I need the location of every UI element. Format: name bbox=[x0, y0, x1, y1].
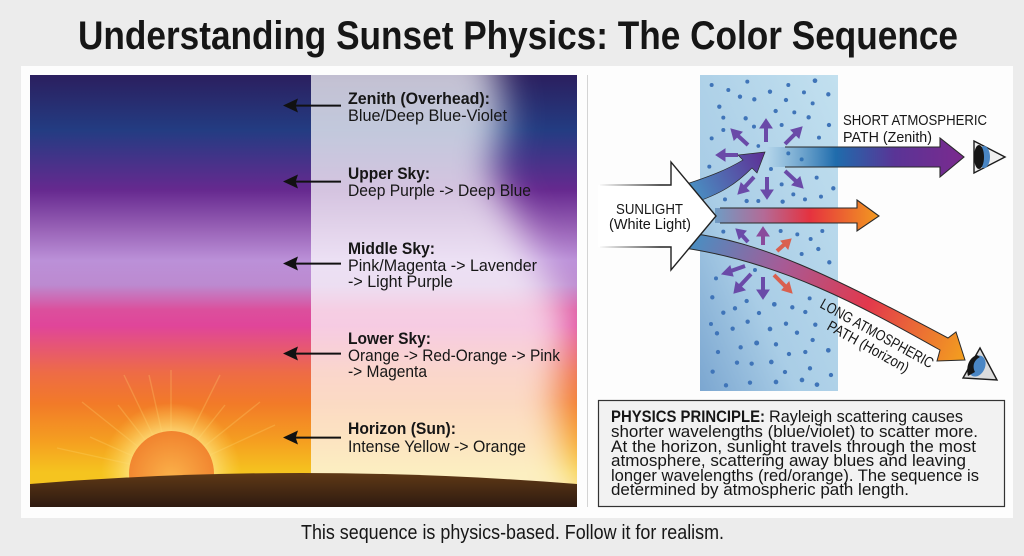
callout text bbox=[611, 408, 979, 499]
arrow: zenith bbox=[283, 98, 341, 112]
zenith colours: Blue/Deep Blue-Violet bbox=[348, 106, 507, 125]
panel divider bbox=[586, 75, 588, 507]
arrow: horizon bbox=[283, 430, 341, 444]
sun glow bbox=[106, 406, 236, 478]
callout text: determined by atmospheric path length. bbox=[611, 481, 909, 499]
label: upper sky bbox=[283, 164, 531, 200]
label: lower sky bbox=[283, 329, 560, 381]
atmosphere column bbox=[700, 75, 838, 391]
air particles, lower bbox=[709, 229, 833, 387]
callout text: longer wavelengths (red/orange). The sequence is bbox=[611, 467, 979, 485]
scattered light arrows, upper cluster bbox=[716, 119, 803, 199]
lower sky colours, second line: -> Magenta bbox=[348, 362, 427, 381]
sky gradient bbox=[30, 75, 577, 507]
callout text: At the horizon, sunlight travels through the most bbox=[611, 438, 976, 456]
label: middle sky bbox=[283, 239, 537, 291]
lower sky colours: Orange -> Red-Orange -> Pink bbox=[348, 346, 560, 365]
short path label: SHORT ATMOSPHERIC bbox=[843, 112, 987, 129]
arrow: long atmospheric path bbox=[684, 233, 965, 361]
main white panel bbox=[21, 66, 1013, 518]
middle sky colours: Pink/Magenta -> Lavender bbox=[348, 256, 537, 275]
arrow: middle sky bbox=[283, 256, 341, 270]
sunlight label: SUNLIGHT bbox=[616, 201, 683, 218]
callout text: atmosphere, scattering away blues and leaving bbox=[611, 452, 966, 470]
middle sky colours, second line: -> Light Purple bbox=[348, 272, 453, 291]
arrow: light bending into scatter point bbox=[680, 152, 765, 204]
callout box bbox=[598, 400, 1004, 506]
middle sky heading: Middle Sky: bbox=[348, 239, 435, 258]
zenith heading: Zenith (Overhead): bbox=[348, 89, 490, 108]
horizon colours: Intense Yellow -> Orange bbox=[348, 437, 526, 456]
icon: eye at zenith bbox=[974, 141, 1005, 173]
footer caption: This sequence is physics-based. Follow it for realism. bbox=[301, 522, 724, 544]
callout text: shorter wavelengths (blue/violet) to scatter more. bbox=[611, 423, 978, 441]
horizon heading: Horizon (Sun): bbox=[348, 419, 456, 438]
label: horizon bbox=[283, 419, 526, 456]
lower sky heading: Lower Sky: bbox=[348, 329, 431, 348]
label: zenith bbox=[283, 89, 507, 125]
upper sky heading: Upper Sky: bbox=[348, 164, 430, 183]
long path label: PATH (Horizon) bbox=[824, 318, 912, 377]
callout text: Rayleigh scattering causes bbox=[769, 408, 963, 426]
callout: physics principle bbox=[598, 400, 1004, 506]
arrow: short atmospheric path bbox=[767, 138, 964, 177]
callout heading: PHYSICS PRINCIPLE: bbox=[611, 408, 765, 426]
pale label overlay bbox=[311, 75, 577, 484]
upper sky colours: Deep Purple -> Deep Blue bbox=[348, 181, 531, 200]
long path label: LONG ATMOSPHERIC bbox=[817, 296, 936, 372]
scattered light arrows, lower cluster bbox=[722, 227, 792, 299]
panel: sunset sky colour sequence bbox=[30, 75, 577, 507]
air particles, upper bbox=[707, 78, 835, 204]
short path label bbox=[843, 112, 987, 146]
ground silhouette bbox=[30, 473, 577, 507]
panel: atmospheric path diagram bbox=[598, 75, 1005, 391]
arrow: lower sky bbox=[283, 346, 341, 360]
arrow: direct red-orange light bbox=[715, 200, 879, 231]
sun disc bbox=[129, 431, 214, 478]
white light label: (White Light) bbox=[609, 216, 691, 233]
icon: eye at horizon bbox=[963, 348, 997, 380]
arrow: upper sky bbox=[283, 174, 341, 188]
arrow: white sunlight bbox=[598, 162, 716, 270]
short path label: PATH (Zenith) bbox=[843, 129, 932, 146]
sun rays bbox=[57, 370, 275, 473]
